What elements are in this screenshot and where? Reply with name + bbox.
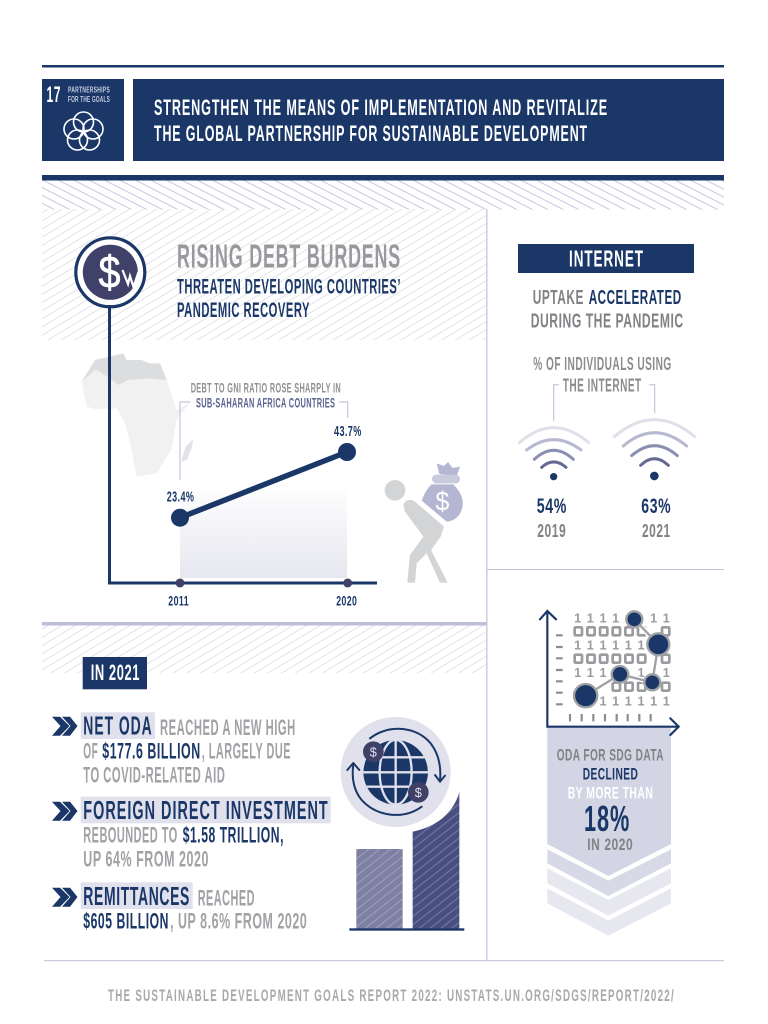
item: net ODA: , LARGELY DUE	[202, 738, 291, 763]
icon: wifi 2021	[614, 420, 695, 480]
subheading: ACCELERATED	[589, 286, 682, 309]
item: net ODA: TO COVID-RELATED AID	[83, 762, 225, 787]
values: 63%	[641, 494, 671, 518]
values: 54%	[537, 494, 567, 518]
item: net ODA: REACHED A NEW HIGH	[160, 715, 296, 740]
heading: IN 2021	[91, 660, 140, 685]
icon: person carrying money bag	[385, 462, 463, 583]
panel: internet	[518, 244, 695, 541]
icon: wifi 2019	[519, 428, 589, 480]
icon: globe and rising bars: $	[415, 786, 422, 800]
callout text: 18%	[584, 798, 630, 839]
item: net ODA	[52, 712, 296, 787]
goal name	[68, 86, 110, 104]
top rule	[42, 65, 724, 68]
item: foreign direct investment	[52, 797, 331, 872]
panel: rising debt burdens	[76, 238, 463, 609]
heading: INTERNET	[569, 246, 644, 272]
item: remittances: , UP 8.6% FROM 2020	[170, 909, 307, 934]
callout text: IN 2020	[587, 836, 633, 854]
panel: in 2021	[52, 657, 464, 934]
icon: five interlocking rings	[64, 112, 103, 150]
subheading: PANDEMIC RECOVERY	[177, 299, 310, 322]
callout text	[557, 747, 664, 854]
icon: data chart: 111111	[599, 694, 670, 708]
years: 2019	[537, 521, 566, 541]
goal name: PARTNERSHIPS	[68, 86, 110, 94]
item: remittances	[52, 882, 307, 934]
item: remittances: REACHED	[198, 885, 255, 910]
icon: globe and rising bars: $	[370, 745, 377, 759]
icon: data chart: 111111	[574, 612, 670, 626]
axes	[110, 305, 377, 583]
title banner	[133, 79, 724, 161]
callout text: DECLINED	[583, 766, 638, 784]
callout text: ODA FOR SDG DATA	[557, 747, 664, 765]
item: net ODA: OF	[83, 738, 98, 763]
callout text: BY MORE THAN	[568, 784, 653, 802]
item: remittances: REMITTANCES	[83, 883, 190, 911]
chart caption: SUB-SAHARAN AFRICA COUNTRIES	[196, 395, 335, 410]
icon: data chart: 11111	[574, 666, 670, 680]
years	[537, 521, 671, 541]
section bar	[42, 175, 724, 180]
x axis labels: 2020	[336, 593, 357, 609]
data line	[171, 443, 356, 527]
chart caption: DEBT TO GNI RATIO ROSE SHARPLY IN	[191, 381, 341, 396]
value labels: 43.7%	[334, 424, 362, 440]
years: 2021	[642, 521, 671, 541]
values	[537, 494, 671, 518]
chart: debt to GNI ratio	[110, 305, 377, 609]
icon: falling dollar	[76, 238, 145, 307]
subheading: THREATEN DEVELOPING COUNTRIES’	[177, 276, 401, 298]
map of Africa	[82, 353, 193, 477]
item: foreign direct investment: $1.58 TRILLION,	[183, 823, 284, 848]
item: remittances: $605 BILLION	[83, 909, 169, 934]
caption: THE INTERNET	[563, 375, 642, 395]
chart area	[180, 483, 347, 578]
item: foreign direct investment: FOREIGN DIRECT INVESTMENT	[83, 797, 329, 825]
goal number: 17	[46, 82, 61, 107]
panel: ODA for SDG data	[540, 611, 679, 936]
caption	[533, 354, 672, 395]
value labels	[167, 424, 362, 506]
icon: data chart	[540, 611, 679, 735]
heading	[518, 244, 694, 273]
x axis labels: 2011	[168, 593, 189, 609]
chevron banner	[547, 727, 671, 936]
subheading	[177, 276, 401, 322]
icon: globe and rising bars	[341, 717, 464, 931]
item: net ODA: NET ODA	[83, 712, 153, 740]
icon: data chart: 111111	[574, 638, 645, 652]
x axis markers	[176, 578, 352, 588]
subheading	[531, 286, 684, 333]
icon: falling dollar: $	[98, 246, 120, 298]
subheading: UPTAKE	[533, 286, 584, 309]
heading	[83, 657, 147, 689]
item: net ODA: $177.6 BILLION	[102, 738, 201, 763]
item: foreign direct investment: REBOUNDED TO	[83, 823, 178, 848]
x axis labels	[168, 593, 357, 609]
item: foreign direct investment: UP 64% FROM 2020	[83, 847, 209, 872]
heading: RISING DEBT BURDENS	[177, 238, 401, 274]
icon: person carrying money bag: $	[435, 487, 449, 517]
goal name: FOR THE GOALS	[68, 95, 110, 104]
chart caption	[191, 381, 341, 410]
value labels: 23.4%	[167, 490, 194, 506]
goal 17 badge	[42, 79, 124, 161]
